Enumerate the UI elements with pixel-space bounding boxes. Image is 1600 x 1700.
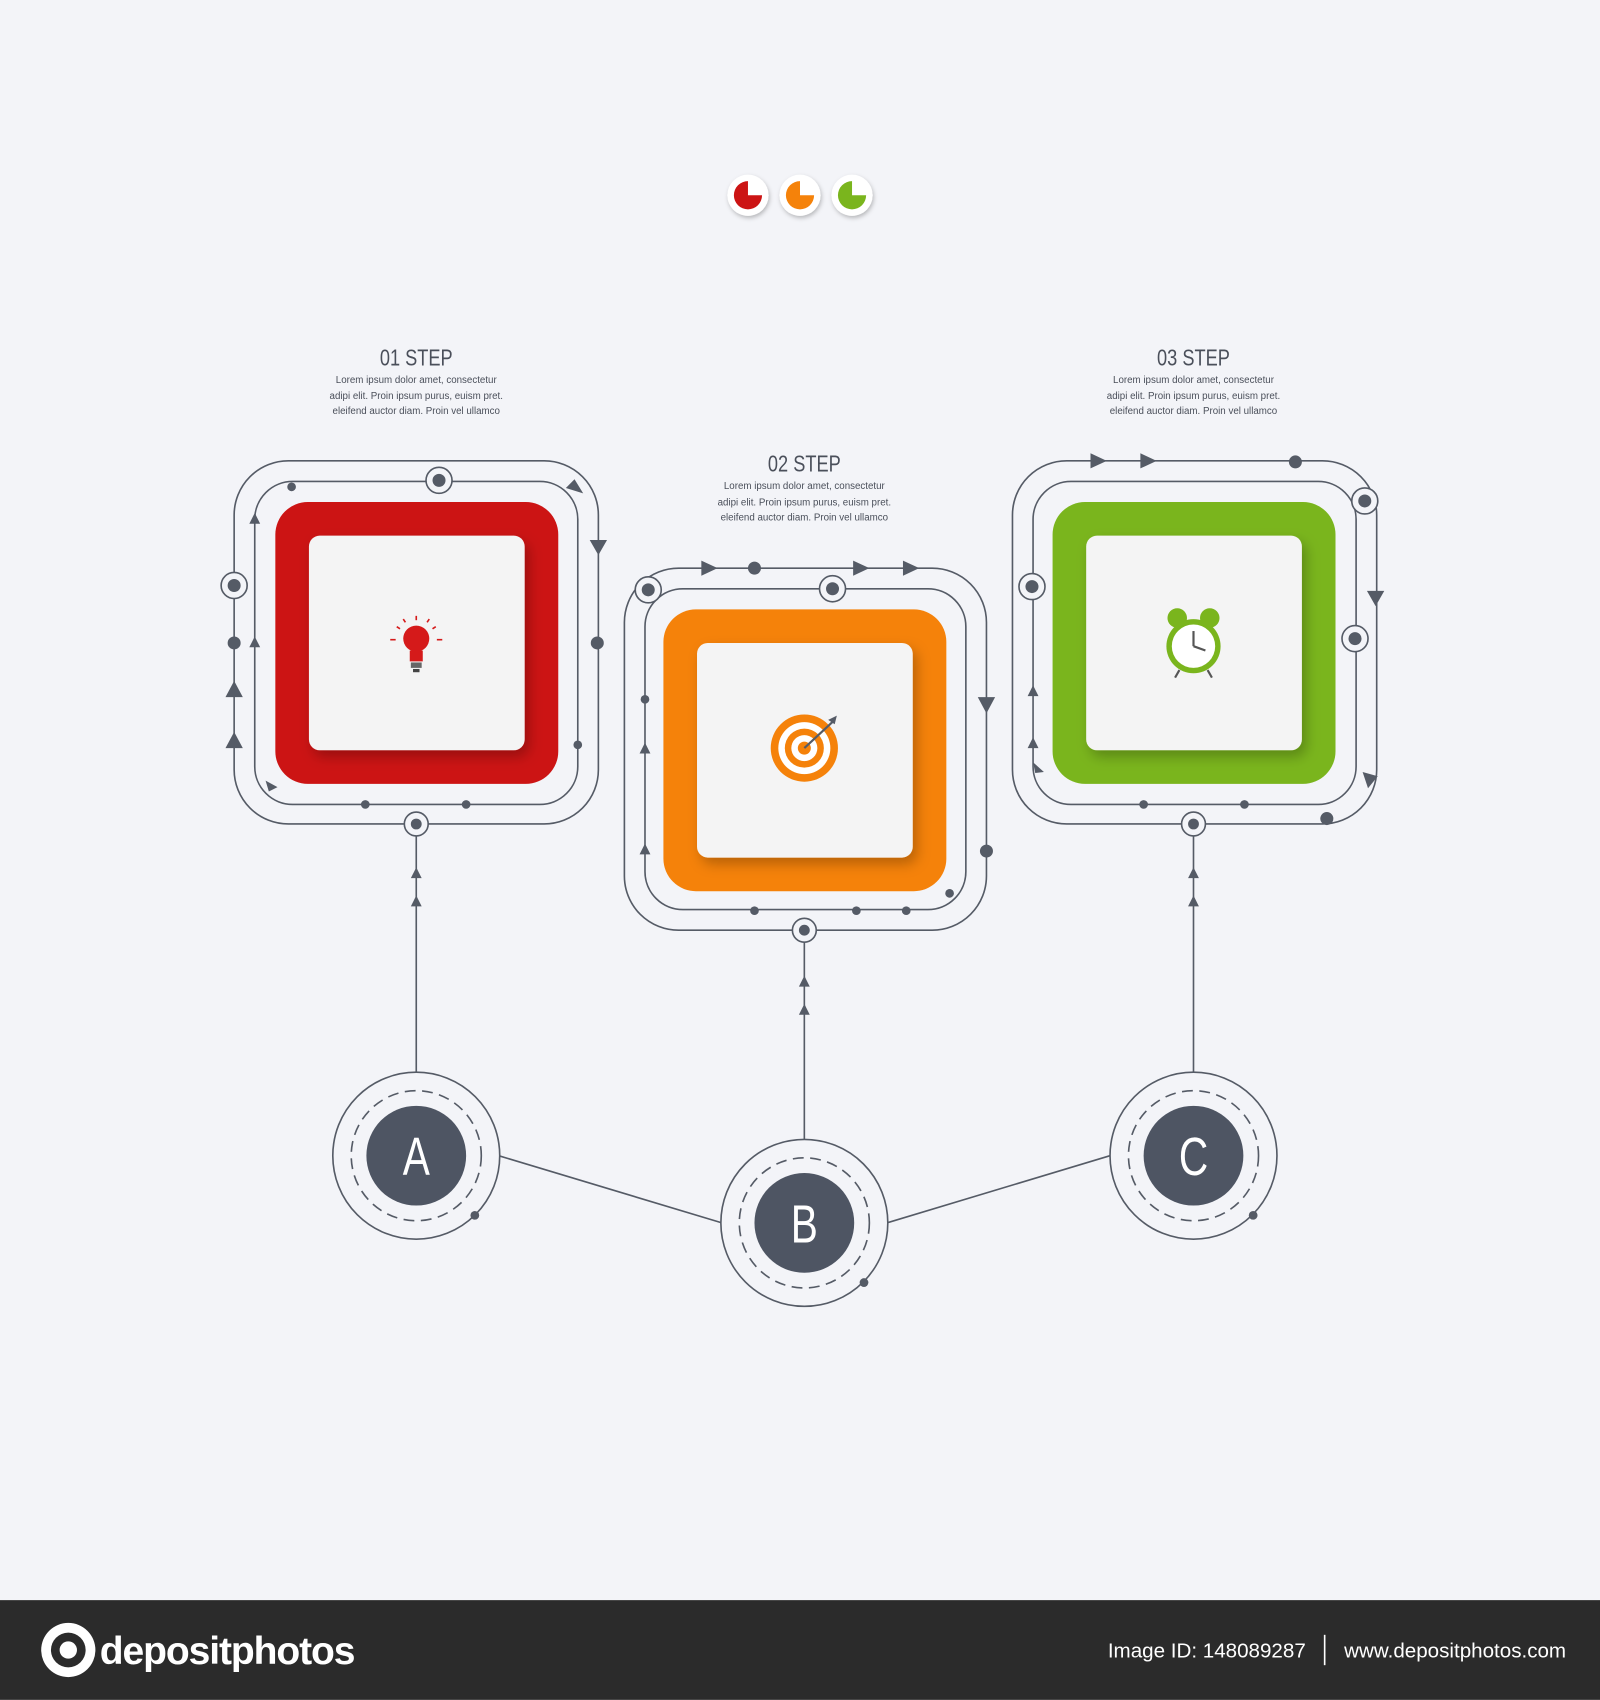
step 1 text: Lorem ipsum dolor amet, consectetur — [336, 375, 497, 386]
step 3 text: 03 STEP — [1157, 346, 1230, 371]
step 3 text — [1107, 346, 1280, 417]
icon: target — [771, 714, 838, 782]
step 1 text: adipi elit. Proin ipsum purus, euism pret. — [330, 391, 503, 402]
footer bar: depositphotos — [100, 1630, 355, 1673]
panel: step 2 orange square — [663, 609, 946, 891]
circle A: A — [403, 1128, 430, 1188]
circle B — [721, 1139, 888, 1306]
step 2 text: Lorem ipsum dolor amet, consectetur — [724, 481, 886, 492]
circuit lines step 1 — [234, 461, 1377, 1223]
circle A — [333, 1072, 500, 1239]
step 1 text — [330, 346, 503, 417]
footer bar: Image ID: 148089287 — [1108, 1640, 1306, 1663]
arrows — [225, 681, 243, 697]
connector nodes — [221, 467, 1378, 942]
step 1 text: eleifend auctor diam. Proin vel ullamco — [333, 406, 501, 417]
step 3 text: Lorem ipsum dolor amet, consectetur — [1113, 375, 1275, 386]
footer bar: www.depositphotos.com — [1343, 1640, 1566, 1663]
step 2 text: eleifend auctor diam. Proin vel ullamco — [721, 512, 889, 523]
circle C — [1110, 1072, 1277, 1239]
icon: bulb — [390, 616, 442, 672]
footer bar — [0, 1600, 1600, 1700]
step 3 text: adipi elit. Proin ipsum purus, euism pret. — [1107, 391, 1280, 402]
step 1 text: 01 STEP — [380, 346, 453, 371]
panel: step 1 red square — [275, 502, 558, 784]
step 3 text: eleifend auctor diam. Proin vel ullamco — [1110, 406, 1278, 417]
step 2 text: adipi elit. Proin ipsum purus, euism pret. — [718, 497, 891, 508]
step 2 text — [718, 452, 891, 523]
panel: step 3 green square — [1053, 502, 1336, 784]
top color dots — [727, 175, 873, 216]
circle C: C — [1179, 1128, 1208, 1188]
step 2 text: 02 STEP — [768, 452, 841, 477]
icon: alarm clock — [1166, 608, 1221, 678]
circle B: B — [791, 1195, 818, 1255]
